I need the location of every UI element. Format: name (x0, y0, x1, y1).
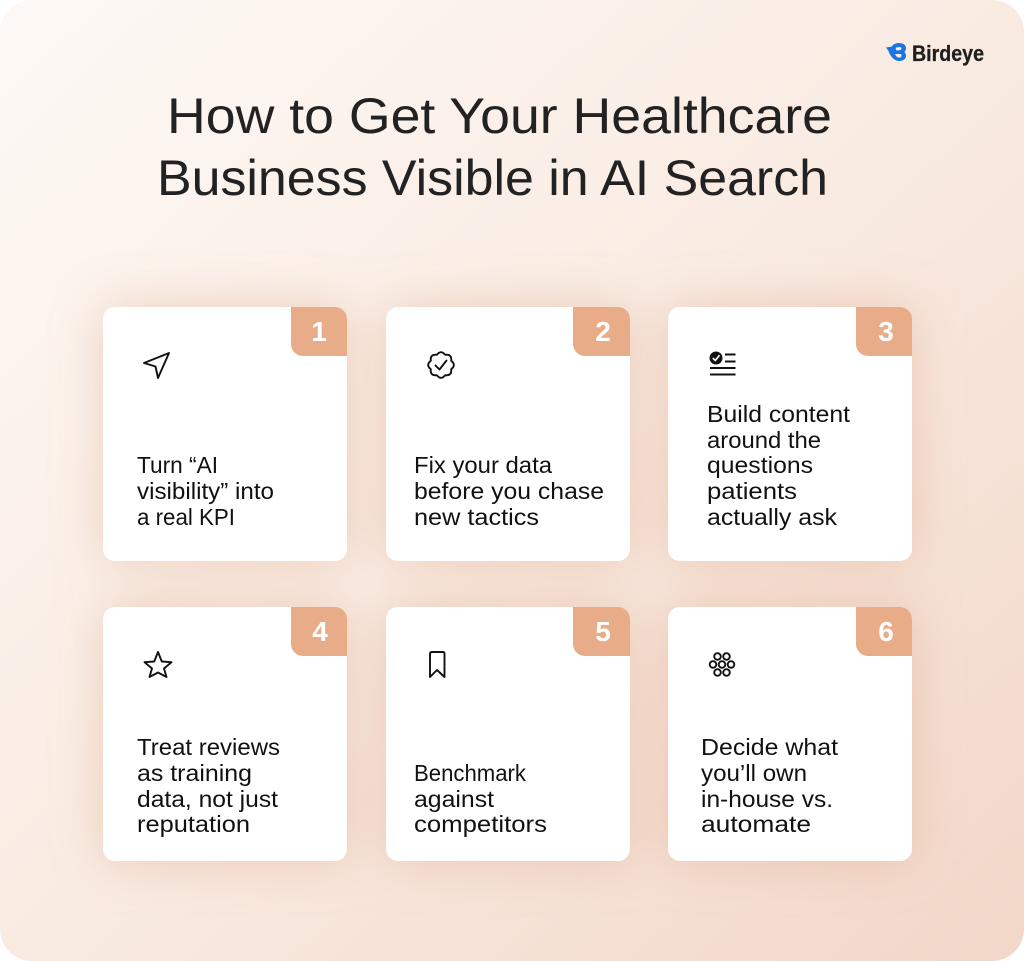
card 3 text: around the (707, 427, 821, 453)
card 3 text: patients (707, 478, 797, 504)
card 4 text (137, 734, 280, 837)
logo: Birdeye (886, 41, 984, 66)
number badge 4: 4 (312, 616, 328, 647)
title (157, 88, 832, 206)
card 5 text (414, 760, 547, 837)
card 3 text: actually ask (707, 504, 837, 530)
panel: card 6 (668, 607, 912, 861)
card 5 text: Benchmark (414, 760, 526, 786)
icon: flower cluster (710, 653, 734, 676)
number badge 1: 1 (311, 316, 327, 347)
card 4 text: reputation (137, 811, 250, 837)
icon: Birdeye bird (886, 43, 906, 61)
number badge 3 (856, 307, 912, 356)
card 5 text: competitors (414, 811, 547, 837)
card 2 text: before you chase (414, 478, 604, 504)
card 1 text: Turn “AI (137, 452, 218, 478)
card 6 text: Decide what (701, 734, 838, 760)
icon: checklist (710, 352, 736, 374)
number badge 6 (856, 607, 912, 656)
card 1 text (137, 452, 274, 530)
card 6 text: automate (701, 811, 811, 837)
number badge 4 (291, 607, 347, 656)
number badge 1 (291, 307, 347, 356)
panel: card 1 (103, 307, 347, 561)
card 2 text: new tactics (414, 504, 539, 530)
card 2 text: Fix your data (414, 452, 553, 478)
panel: card 3 (668, 307, 912, 561)
number badge 6: 6 (878, 616, 894, 647)
card 6 text (701, 734, 838, 837)
card shadows (103, 307, 912, 861)
panel: card 4 (103, 607, 347, 861)
icon: star (144, 652, 172, 677)
number badge 2: 2 (595, 316, 611, 347)
card 4 text: as training (137, 760, 252, 786)
card 1 text: a real KPI (137, 504, 235, 530)
icon: paper plane (144, 353, 169, 378)
icon: bookmark (430, 652, 444, 677)
card 3 text: Build content (707, 401, 850, 427)
card 3 text (707, 401, 850, 530)
icon: verified badge (428, 352, 454, 378)
logo wordmark: Birdeye (912, 41, 984, 66)
card 6 text: in-house vs. (701, 786, 833, 812)
panel: card 2 (386, 307, 630, 561)
card 3 text: questions (707, 452, 813, 478)
card 4 text: data, not just (137, 786, 278, 812)
panel: card 5 (386, 607, 630, 861)
card 5 text: against (414, 786, 494, 812)
number badge 5: 5 (595, 616, 611, 647)
number badge 5 (573, 607, 630, 656)
card 1 text: visibility” into (137, 478, 274, 504)
card 4 text: Treat reviews (137, 734, 280, 760)
card 2 text (414, 452, 604, 530)
title: How to Get Your Healthcare (167, 88, 832, 144)
card 6 text: you’ll own (701, 760, 807, 786)
number badge 3: 3 (878, 316, 894, 347)
title: Business Visible in AI Search (157, 150, 828, 206)
number badge 2 (573, 307, 630, 356)
